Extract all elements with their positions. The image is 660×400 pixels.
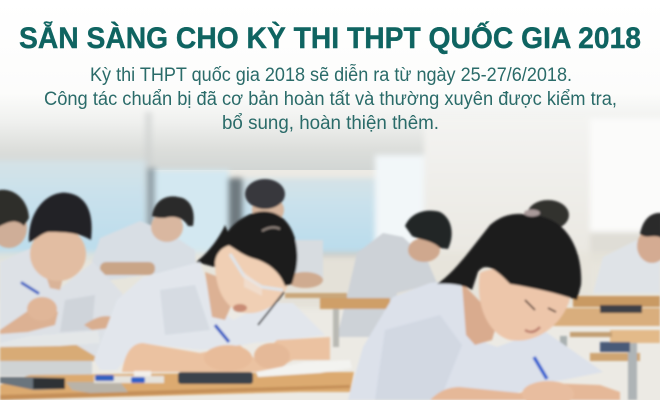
photo: students taking the exam — [0, 179, 660, 400]
front desk — [0, 372, 354, 400]
student: back right boy — [337, 211, 452, 337]
student: far right boy — [593, 213, 660, 293]
intro text: Kỳ thi THPT quốc gia 2018 sẽ diễn ra từ ngày 25-27/6/2018. — [90, 64, 572, 86]
intro text: bổ sung, hoàn thiện thêm. — [222, 113, 439, 134]
student: back boy behind main girl — [245, 179, 323, 288]
pens and eraser — [94, 371, 164, 383]
title: SẴN SÀNG CHO KỲ THI THPT QUỐC GIA 2018 — [19, 20, 641, 55]
paper on left desk — [0, 331, 100, 347]
intro text — [44, 64, 617, 134]
classroom windows and wall — [0, 112, 660, 308]
back desks — [0, 293, 660, 400]
intro text: Công tác chuẩn bị đã cơ bản hoàn tất và thường xuyên được kiểm tra, — [44, 89, 617, 110]
student: right girl — [348, 210, 620, 400]
student: back middle boy — [92, 196, 196, 280]
student: far left boy — [0, 190, 29, 248]
paper on front desk — [256, 360, 352, 377]
phone and exam card — [0, 377, 128, 393]
student: left girl — [0, 193, 125, 358]
student: hidden behind right girl — [527, 200, 569, 230]
student: main girl with glasses — [94, 211, 330, 372]
calculator — [178, 372, 253, 384]
